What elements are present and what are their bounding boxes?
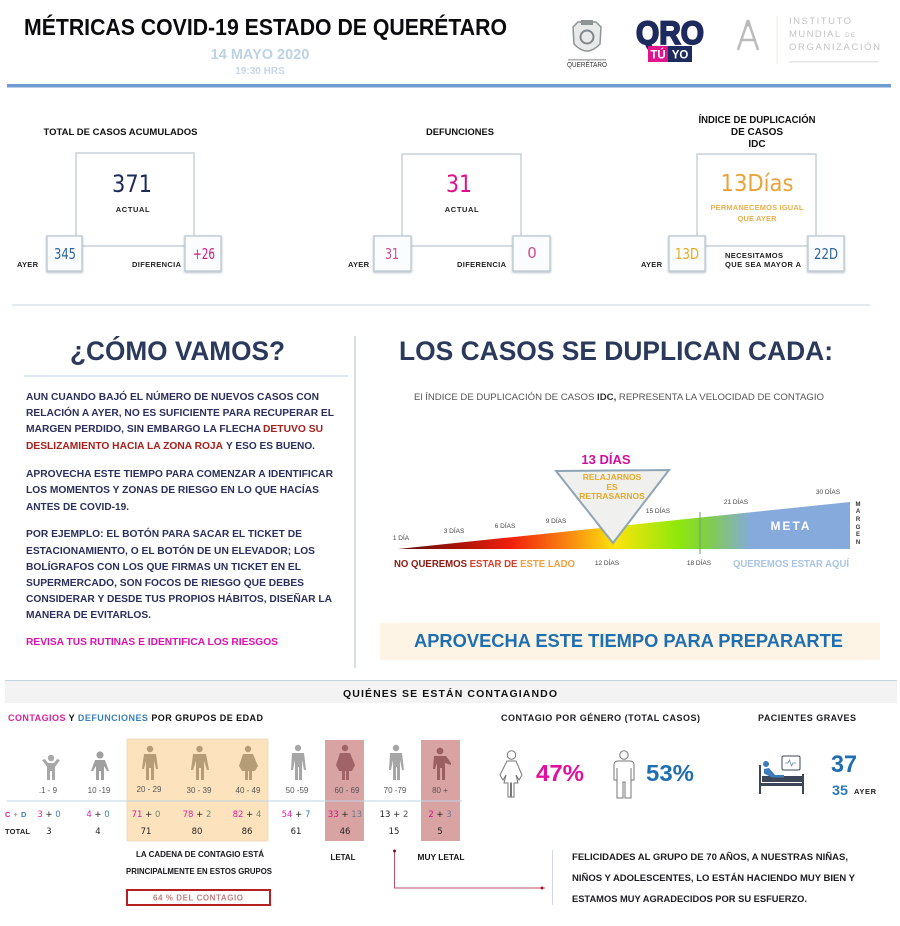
chart: grupos de edad: 3	[46, 827, 52, 837]
panel: índice de duplicación de casos: 13D	[675, 245, 699, 263]
date and time	[211, 47, 309, 77]
chart: escala de duplicación: META	[770, 519, 812, 533]
chart: grupos de edad: 50 -59	[286, 786, 309, 795]
chart: grupos de edad: TOTAL	[5, 827, 30, 836]
text block: descripción IDC: El ÍNDICE DE DUPLICACIÓN DE CASOS IDC, REPRESENTA LA VELOCIDAD DE CONTAGIO	[414, 392, 824, 402]
text block: felicitación: NIÑOS Y ADOLESCENTES, LO ESTÁN HACIENDO MUY BIEN Y	[572, 873, 855, 883]
panel: defunciones	[348, 127, 550, 271]
icon: adulto 20-29	[142, 746, 158, 780]
chart: grupos de edad: 61	[291, 827, 301, 837]
date and time: 19:30 HRS	[235, 66, 285, 77]
caption: cadena de contagio	[126, 850, 273, 876]
panel: total de casos acumulados: DIFERENCIA	[132, 260, 182, 269]
chart: grupos de edad: 33 + 13	[328, 810, 362, 820]
chart: grupos de edad: 54 + 7	[282, 810, 310, 820]
callout: 13 días triangle: RELAJARNOS	[583, 472, 642, 482]
panel: contagio por género: CONTAGIO POR GÉNERO (TOTAL CASOS)	[501, 713, 700, 723]
text block: cómo vamos: SUPERMERCADO, SON FOCOS DE RIESGO QUE DEBES	[26, 577, 304, 589]
text block: cómo vamos: Y ESO ES BUENO.	[226, 440, 315, 452]
chart: escala de duplicación: 15 DÍAS	[646, 506, 671, 515]
text block: cómo vamos: POR EJEMPLO: EL BOTÓN PARA SACAR EL TICKET DE	[26, 527, 302, 540]
text block: felicitación: ESTAMOS MUY AGRADECIDOS POR SU ESFUERZO.	[572, 894, 807, 904]
heading: los casos se duplican: LOS CASOS SE DUPLICAN CADA:	[399, 336, 833, 366]
text block: felicitación	[572, 852, 855, 904]
panel: total de casos acumulados	[17, 127, 221, 271]
chart: grupos de edad: 80	[192, 827, 202, 837]
chart: grupos de edad: 4	[95, 827, 101, 837]
chart: grupos de edad: 70 -79	[384, 786, 407, 795]
caption: cadena de contagio: PRINCIPALMENTE EN ESTOS GRUPOS	[126, 867, 273, 876]
panel: total de casos acumulados: 345	[54, 245, 76, 263]
panel: índice de duplicación de casos: QUE AYER	[738, 214, 777, 223]
panel: defunciones: ACTUAL	[445, 205, 479, 214]
panel: contagio por género	[500, 713, 700, 798]
text block: cómo vamos: ANTES DE COVID-19.	[26, 501, 129, 513]
label: margen	[856, 502, 861, 546]
text block: cómo vamos: MARGEN PERDIDO, SIN EMBARGO LA FLECHA	[26, 423, 261, 435]
banner: aprovecha este tiempo: APROVECHA ESTE TIEMPO PARA PREPARARTE	[414, 631, 843, 651]
callout: 13 días triangle: RETRASARNOS	[579, 491, 645, 501]
icon: mujer	[500, 751, 522, 797]
title: MÉTRICAS COVID-19 ESTADO DE QUERÉTARO	[24, 13, 507, 40]
panel: defunciones: 0	[527, 244, 537, 262]
panel: defunciones: DIFERENCIA	[457, 260, 507, 269]
label: muy letal: MUY LETAL	[418, 853, 465, 862]
label: margen: E	[856, 532, 860, 538]
chart: grupos de edad: 3 + 0	[37, 810, 61, 820]
chart: grupos de edad: 46	[340, 827, 350, 837]
logo: Instituto Mundial de Organización: MUNDIAL DE	[789, 29, 855, 40]
panel: pacientes graves	[758, 713, 877, 798]
panel: índice de duplicación de casos: NECESITAMOS	[725, 251, 783, 260]
panel: contagio por género: 47%	[536, 760, 584, 786]
chart: grupos de edad: 86	[242, 827, 252, 837]
logo: Querétaro shield	[567, 20, 607, 69]
chart: grupos de edad: .1 - 9	[39, 786, 58, 795]
chart: escala de duplicación: 12 DÍAS	[595, 558, 620, 567]
text block: cómo vamos: DESLIZAMIENTO HACIA LA ZONA ROJA	[26, 440, 223, 452]
chart: grupos de edad: 5	[437, 827, 443, 837]
panel: defunciones: 31	[385, 245, 399, 263]
logo: Instituto Mundial de Organización: ORGANIZACIÓN	[789, 42, 880, 53]
chart: grupos de edad: 30 - 39	[187, 786, 212, 795]
heading: contagios y defunciones por grupos de edad: CONTAGIOS Y DEFUNCIONES POR GRUPOS DE EDAD	[8, 713, 264, 723]
panel: total de casos acumulados: +26	[193, 245, 215, 263]
icon: paciente en cama	[759, 756, 804, 794]
panel: defunciones: AYER	[348, 260, 370, 269]
chart: escala de duplicación: 1 DÍA	[393, 533, 410, 542]
panel: índice de duplicación de casos: AYER	[641, 260, 663, 269]
panel: índice de duplicación de casos: ÍNDICE DE DUPLICACIÓN	[698, 113, 816, 126]
panel: índice de duplicación de casos: DE CASOS	[731, 127, 783, 138]
callout: 64 % del contagio: 64 % DEL CONTAGIO	[153, 894, 243, 902]
chart: grupos de edad: 15	[389, 827, 399, 837]
icon: adolescente 10-19	[91, 751, 109, 780]
chart: grupos de edad: 71 + 0	[132, 810, 160, 820]
logo: QRO TÚ YO: QRO	[636, 15, 704, 51]
text block: cómo vamos: BOLÍGRAFOS CON LOS QUE FIRMAS UN TICKET EN EL	[26, 560, 302, 573]
chart: grupos de edad: 4 + 0	[86, 810, 110, 820]
text block: cómo vamos: CONSIDERAR Y DESDE TUS PROPIOS HÁBITOS, DISEÑAR LA	[26, 592, 332, 605]
text block: felicitación: FELICIDADES AL GRUPO DE 70 AÑOS, A NUESTRAS NIÑAS,	[572, 852, 848, 862]
text block: cómo vamos: REVISA TUS RUTINAS E IDENTIFICA LOS RIESGOS	[26, 636, 278, 648]
logo: Querétaro shield: QUERÉTARO	[567, 60, 607, 69]
chart: grupos de edad: 71	[141, 827, 151, 837]
panel: índice de duplicación de casos: IDC	[748, 139, 766, 150]
text block: cómo vamos: DETUVO SU	[263, 423, 323, 435]
chart: grupos de edad: 80 +	[432, 786, 448, 795]
heading bar: quiénes se están contagiando	[5, 680, 897, 703]
date and time: 14 MAYO 2020	[211, 47, 309, 63]
panel: defunciones: DEFUNCIONES	[426, 127, 494, 138]
chart: grupos de edad: 40 - 49	[236, 786, 261, 795]
label: letal: LETAL	[330, 853, 356, 862]
panel: total de casos acumulados: TOTAL DE CASOS ACUMULADOS	[44, 127, 198, 138]
logo: Instituto Mundial de Organización	[738, 16, 880, 64]
panel: pacientes graves: 35	[832, 782, 848, 798]
text block: cómo vamos: RELACIÓN A AYER, NO ES SUFICIENTE PARA RECUPERAR EL	[26, 406, 335, 419]
panel: defunciones: 31	[446, 170, 472, 198]
icon: niño 1-9	[42, 755, 60, 780]
chart: escala de duplicación: 18 DÍAS	[687, 558, 712, 567]
chart: grupos de edad: 78 + 2	[183, 810, 211, 820]
panel: índice de duplicación de casos: PERMANECEMOS IGUAL	[710, 203, 804, 212]
icon: adulto 70-79	[389, 745, 404, 780]
panel: índice de duplicación de casos	[641, 113, 844, 271]
panel: total de casos acumulados: ACTUAL	[116, 205, 150, 214]
icon: adulto 30-39	[191, 746, 209, 780]
chart: escala de duplicación: 21 DÍAS	[724, 497, 749, 506]
text block: cómo vamos: MANERA DE EVITARLOS.	[26, 609, 151, 621]
icon: adulto 50-59	[291, 745, 306, 780]
caption: cadena de contagio: LA CADENA DE CONTAGIO ESTÁ	[136, 850, 264, 859]
chart: escala de duplicación: 3 DÍAS	[444, 526, 465, 535]
panel: contagio por género: 53%	[646, 760, 694, 786]
chart: grupos de edad: 13 + 2	[380, 810, 408, 820]
chart: grupos de edad: C + D	[5, 810, 27, 819]
panel: índice de duplicación de casos: QUE SEA MAYOR A	[725, 260, 802, 269]
label: margen: R	[856, 517, 861, 523]
chart: escala de duplicación: 9 DÍAS	[546, 516, 567, 525]
label: margen: A	[856, 509, 861, 515]
panel: total de casos acumulados: 371	[112, 170, 152, 198]
text block: cómo vamos: APROVECHA ESTE TIEMPO PARA COMENZAR A IDENTIFICAR	[26, 468, 333, 480]
chart: grupos de edad: 82 + 4	[233, 810, 261, 820]
label: margen: N	[856, 540, 860, 546]
banner: aprovecha este tiempo	[380, 623, 880, 660]
logo: Instituto Mundial de Organización: INSTITUTO	[789, 16, 851, 27]
text block: cómo vamos: AUN CUANDO BAJÓ EL NÚMERO DE NUEVOS CASOS CON	[26, 390, 319, 403]
arrow: grupo 70-79 hacia felicitación	[393, 850, 545, 890]
callout: 13 días triangle: ES	[606, 482, 618, 492]
panel: índice de duplicación de casos: 22D	[814, 245, 838, 263]
icon: mujer 40-49	[239, 746, 258, 780]
chart: escala de duplicación	[393, 452, 861, 570]
chart: grupos de edad: 10 -19	[88, 786, 111, 795]
panel: pacientes graves: PACIENTES GRAVES	[758, 713, 856, 723]
icon: hombre	[614, 751, 634, 798]
chart: escala de duplicación: 30 DÍAS	[816, 487, 841, 496]
heading: cómo vamos: ¿CÓMO VAMOS?	[70, 335, 285, 366]
chart: escala de duplicación: NO QUEREMOS ESTAR DE ESTE LADO	[394, 558, 575, 570]
text block: cómo vamos	[26, 390, 335, 648]
panel: pacientes graves: 37	[831, 751, 857, 778]
panel: total de casos acumulados: AYER	[17, 260, 39, 269]
logo: QRO TÚ YO: YO	[672, 50, 688, 62]
label: margen: M	[856, 502, 860, 508]
panel: pacientes graves: AYER	[854, 787, 877, 796]
heading bar: quiénes se están contagiando: QUIÉNES SE ESTÁN CONTAGIANDO	[343, 687, 557, 700]
chart: grupos de edad	[5, 739, 462, 841]
chart: escala de duplicación: 6 DÍAS	[495, 521, 516, 530]
logo: QRO TÚ YO: TÚ	[650, 48, 666, 62]
panel: índice de duplicación de casos: 13Días	[720, 171, 794, 197]
icon: mujer 60-69	[336, 745, 355, 780]
callout: 13 días triangle: 13 DÍAS	[581, 452, 631, 467]
label: margen: G	[856, 525, 861, 531]
text block: cómo vamos: LOS MOMENTOS Y ZONAS DE RIESGO EN LO QUE HACÍAS	[26, 483, 319, 496]
text block: cómo vamos: ESTACIONAMIENTO, O EL BOTÓN DE UN ELEVADOR; LOS	[26, 544, 315, 557]
callout: 64 % del contagio	[127, 890, 270, 905]
chart: escala de duplicación: QUEREMOS ESTAR AQUÍ	[733, 557, 850, 570]
callout: 13 días triangle	[556, 452, 669, 543]
chart: grupos de edad: 2 + 3	[428, 810, 452, 820]
icon: adulto mayor 80+	[433, 748, 451, 780]
chart: grupos de edad: 20 - 29	[137, 785, 162, 794]
chart: grupos de edad: 60 - 69	[335, 786, 360, 795]
